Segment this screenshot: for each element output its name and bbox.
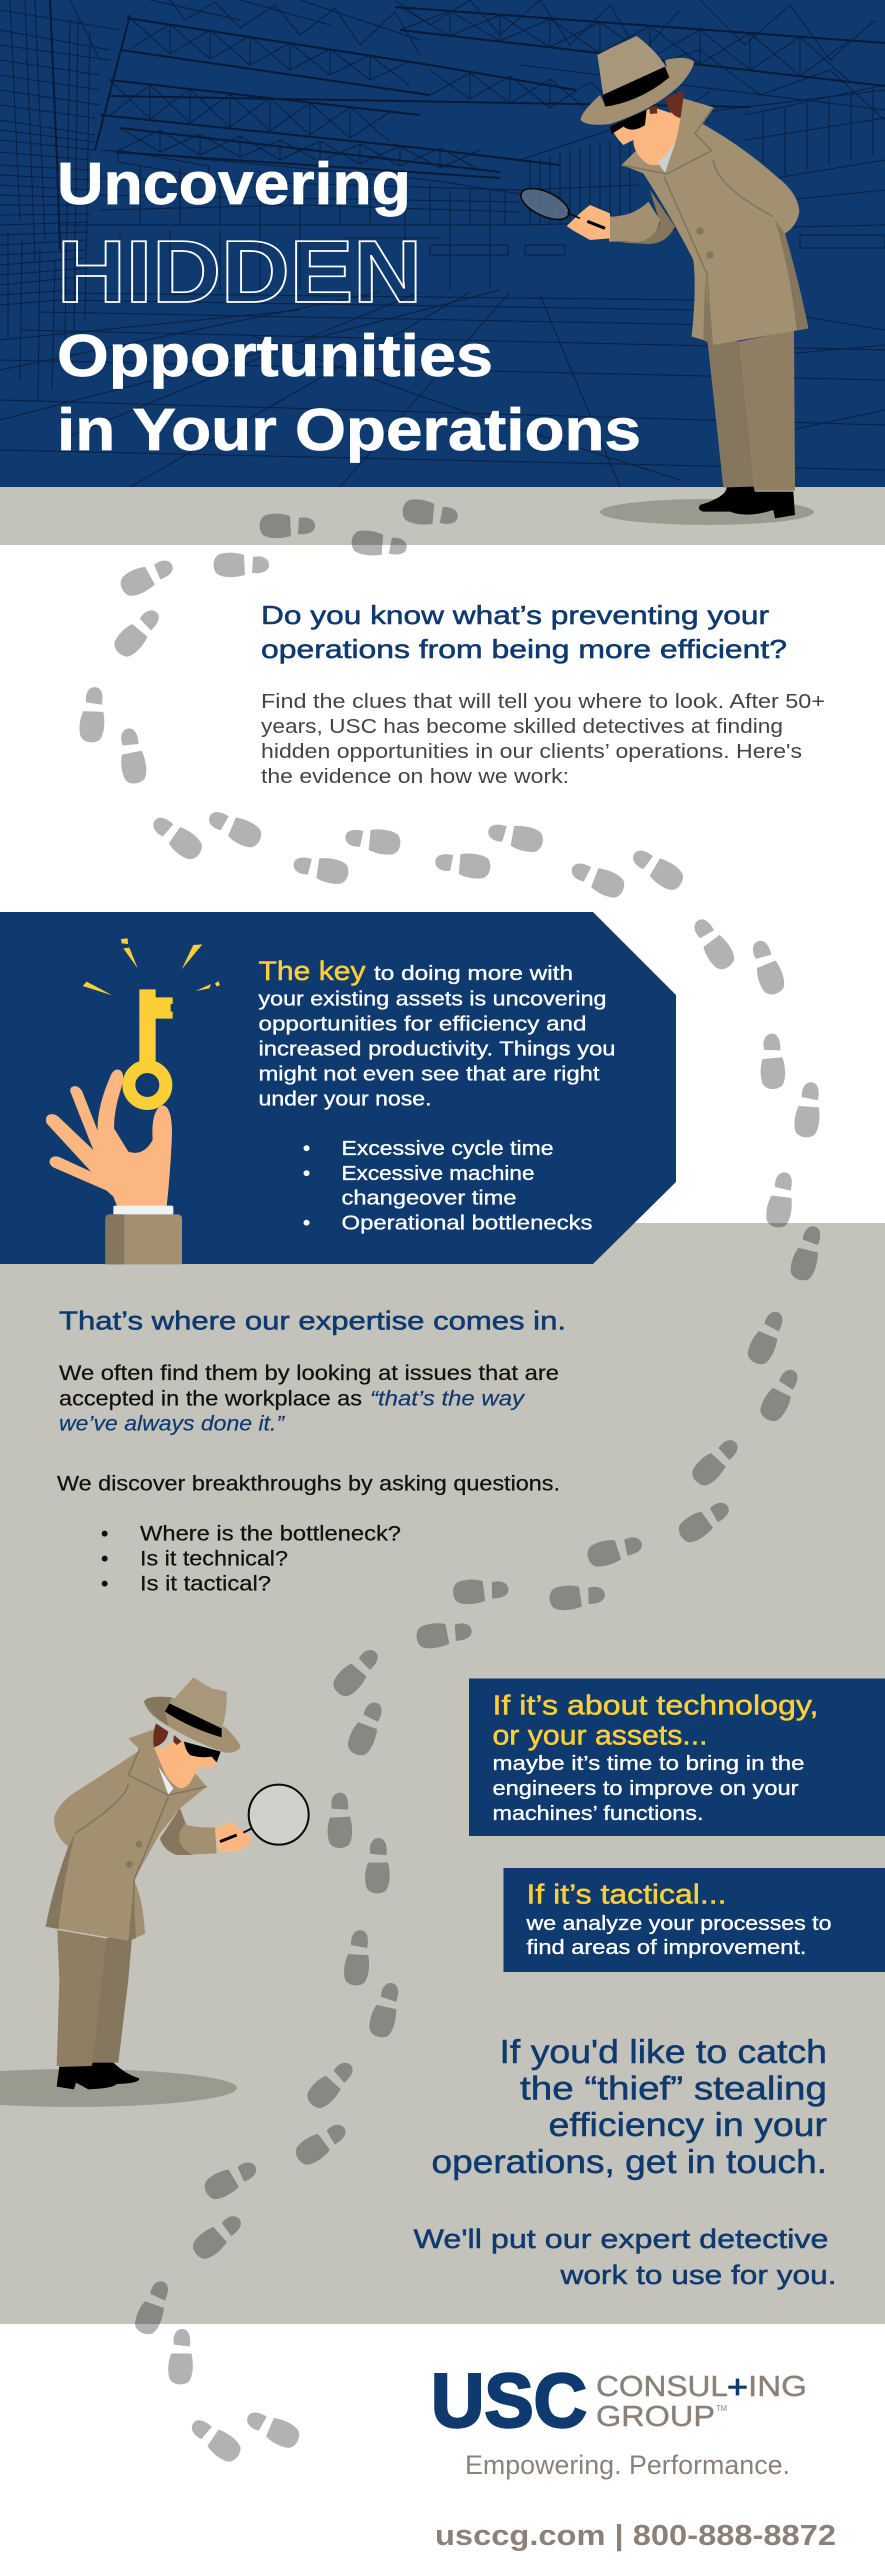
key paragraph <box>258 956 616 1110</box>
key bullet list: • <box>303 1137 310 1160</box>
questions bullet list: Is it technical? <box>140 1548 288 1570</box>
title <box>57 151 641 463</box>
breakthroughs line: We discover breakthroughs by asking questions. <box>57 1472 560 1496</box>
questions bullet list <box>101 1522 401 1596</box>
key paragraph: increased productivity. Things you <box>258 1038 616 1060</box>
logo: USC Consulting Group <box>431 2359 807 2444</box>
key paragraph: your existing assets is uncovering <box>258 988 606 1010</box>
gray lower section <box>0 1223 885 2324</box>
logo: USC Consulting Group: GROUP <box>596 2401 715 2433</box>
panel: the key <box>0 912 676 1264</box>
intro heading: operations from being more efficient? <box>261 634 787 664</box>
key bullet list <box>303 1137 592 1234</box>
key bullet list: Operational bottlenecks <box>342 1212 592 1234</box>
key paragraph: The key <box>258 956 366 986</box>
call to action headline: efficiency in your <box>548 2106 827 2143</box>
detective illustration: lower, with magnifier <box>0 1677 309 2107</box>
hero panel with warehouse wireframe <box>0 0 885 487</box>
intro heading: Do you know what’s preventing your <box>261 600 769 630</box>
expertise paragraph: “that’s the way <box>370 1388 526 1410</box>
expertise section text <box>57 1306 566 1596</box>
callout: technology: If it’s about technology, <box>492 1690 818 1720</box>
intro heading <box>261 600 787 664</box>
intro paragraph <box>261 690 825 788</box>
key bullet list: • <box>303 1212 310 1234</box>
callout: technology: maybe it’s time to bring in the <box>492 1752 804 1775</box>
title: Opportunities <box>57 323 493 389</box>
logo: USC Consulting Group: + <box>727 2369 748 2405</box>
questions bullet list: Is it tactical? <box>140 1572 271 1596</box>
expertise paragraph <box>59 1362 559 1436</box>
icon: hand holding key <box>46 938 220 1264</box>
call to action headline: the “thief” stealing <box>520 2070 827 2106</box>
detective legs and shoes <box>699 330 795 518</box>
key bullet list: Excessive cycle time <box>342 1137 554 1160</box>
title: in Your Operations <box>57 397 641 463</box>
key paragraph: to doing more with <box>374 962 573 985</box>
questions bullet list: • <box>101 1548 108 1570</box>
contact line: usccg.com | 800-888-8872 <box>435 2520 836 2552</box>
title: HIDDEN <box>57 222 422 321</box>
callout: tactical: If it’s tactical... <box>526 1878 726 1910</box>
expertise paragraph: We often find them by looking at issues that are <box>59 1362 559 1385</box>
key paragraph: might not even see that are right <box>258 1062 600 1086</box>
questions bullet list: Where is the bottleneck? <box>140 1522 401 1546</box>
expertise heading: That’s where our expertise comes in. <box>59 1306 566 1336</box>
intro text block <box>261 600 825 788</box>
questions bullet list: • <box>101 1522 108 1546</box>
key paragraph: under your nose. <box>258 1088 432 1110</box>
call to action <box>414 2033 836 2290</box>
title: Uncovering <box>57 151 411 217</box>
footprint trail <box>78 498 827 2466</box>
call to action subline <box>414 2224 836 2290</box>
logo: USC Consulting Group: USC <box>431 2359 587 2444</box>
lower detective upper body, hat and magnifier <box>46 1677 309 1941</box>
intro paragraph: hidden opportunities in our clients’ operations. Here's <box>261 740 802 763</box>
intro paragraph: Find the clues that will tell you where to look. After 50+ <box>261 690 825 713</box>
callout: tactical: find areas of improvement. <box>526 1936 806 1959</box>
tagline: Empowering. Performance. <box>465 2450 790 2480</box>
callout: tactical <box>504 1868 885 1972</box>
expertise paragraph: we’ve always done it.” <box>59 1412 285 1436</box>
callout: technology: engineers to improve on your <box>492 1777 799 1800</box>
call to action headline <box>432 2033 827 2180</box>
key bullet list: • <box>303 1162 310 1185</box>
gray floor band under hero <box>0 487 885 545</box>
call to action headline: operations, get in touch. <box>432 2143 827 2180</box>
logo: USC Consulting Group: CONSUL <box>596 2371 728 2403</box>
lower detective shadow <box>0 2069 237 2107</box>
logo: USC Consulting Group: TM <box>716 2404 727 2413</box>
key bullet list: changeover time <box>342 1186 516 1210</box>
logo: USC Consulting Group: ING <box>748 2371 807 2403</box>
key bullet list: Excessive machine <box>342 1162 534 1185</box>
intro paragraph: years, USC has become skilled detectives at finding <box>261 715 783 738</box>
callout: technology: machines’ functions. <box>492 1802 704 1825</box>
call to action subline: work to use for you. <box>559 2260 836 2290</box>
callout: technology <box>469 1678 885 1836</box>
expertise paragraph: accepted in the workplace as <box>59 1388 362 1410</box>
intro paragraph: the evidence on how we work: <box>261 765 569 788</box>
questions bullet list: • <box>101 1572 108 1596</box>
lower detective legs and shoes <box>57 1930 139 2089</box>
key paragraph: opportunities for efficiency and <box>258 1012 586 1036</box>
detective upper body, hat and magnifier <box>516 36 808 345</box>
callout: technology: or your assets... <box>492 1720 708 1750</box>
call to action headline: If you'd like to catch <box>500 2033 827 2070</box>
detective illustration: top, standing with magnifier <box>516 36 814 525</box>
call to action subline: We'll put our expert detective <box>414 2224 828 2254</box>
callout: tactical: we analyze your processes to <box>525 1912 832 1935</box>
detective shadow <box>600 499 814 525</box>
